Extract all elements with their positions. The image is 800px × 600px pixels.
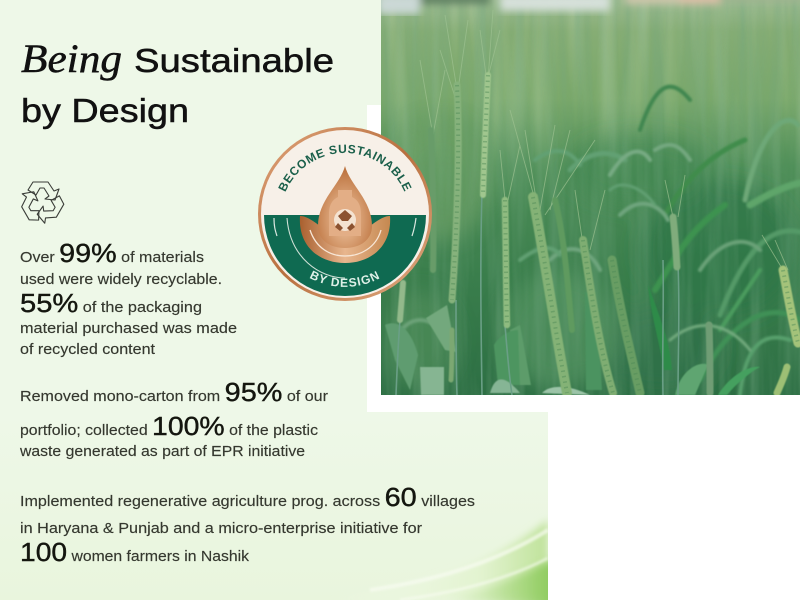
text block: materials: material purchased was made xyxy=(20,321,237,337)
text block: regenerative agriculture xyxy=(20,482,475,567)
text block: packaging and plastic waste: Removed mono-carton from 95% of our xyxy=(20,377,328,407)
text block: materials: used were widely recyclable. xyxy=(20,272,222,288)
wheat ears xyxy=(400,75,798,393)
text block: regenerative agriculture: in Haryana & Punjab and a micro-enterprise initiative for xyxy=(20,521,422,537)
white frame behind photo xyxy=(367,105,800,412)
text block: packaging and plastic waste: waste generated as part of EPR initiative xyxy=(19,444,305,460)
badge copper drop with bottle xyxy=(318,166,372,248)
text block: materials: 55% of the packaging xyxy=(20,288,202,318)
background leaves xyxy=(395,87,800,395)
text block: packaging and plastic waste: portfolio; collected 100% of the plastic xyxy=(20,411,318,441)
badge: become sustainable by design xyxy=(258,127,432,301)
badge text bottom: BY DESIGN xyxy=(310,270,380,287)
foreground leaves xyxy=(385,285,760,395)
text block: packaging and plastic waste xyxy=(19,377,328,460)
text block: regenerative agriculture: 100 women farmers in Nashik xyxy=(20,537,250,567)
photo: wheat field xyxy=(378,0,800,395)
text block: regenerative agriculture: Implemented regenerative agriculture prog. across 60 villages xyxy=(20,482,475,512)
title: by Design xyxy=(21,92,189,129)
text block: materials xyxy=(20,238,237,358)
icon: recycle xyxy=(16,182,66,227)
text block: materials: of recycled content xyxy=(20,342,155,358)
decorative green swoosh xyxy=(370,519,548,600)
panel: left background xyxy=(0,0,548,600)
wheat stems xyxy=(396,190,679,395)
wheat awns xyxy=(420,10,788,270)
tonal patches xyxy=(385,120,800,395)
sky and horizon xyxy=(378,0,800,14)
title: Sustainable xyxy=(134,42,334,79)
badge green lower half xyxy=(264,215,426,296)
title xyxy=(21,36,334,129)
badge text top: BECOME SUSTAINABLE xyxy=(278,144,412,192)
wheat ear grain texture xyxy=(452,75,798,393)
text block: materials: Over 99% of materials xyxy=(20,238,204,268)
title: Being xyxy=(21,36,122,81)
